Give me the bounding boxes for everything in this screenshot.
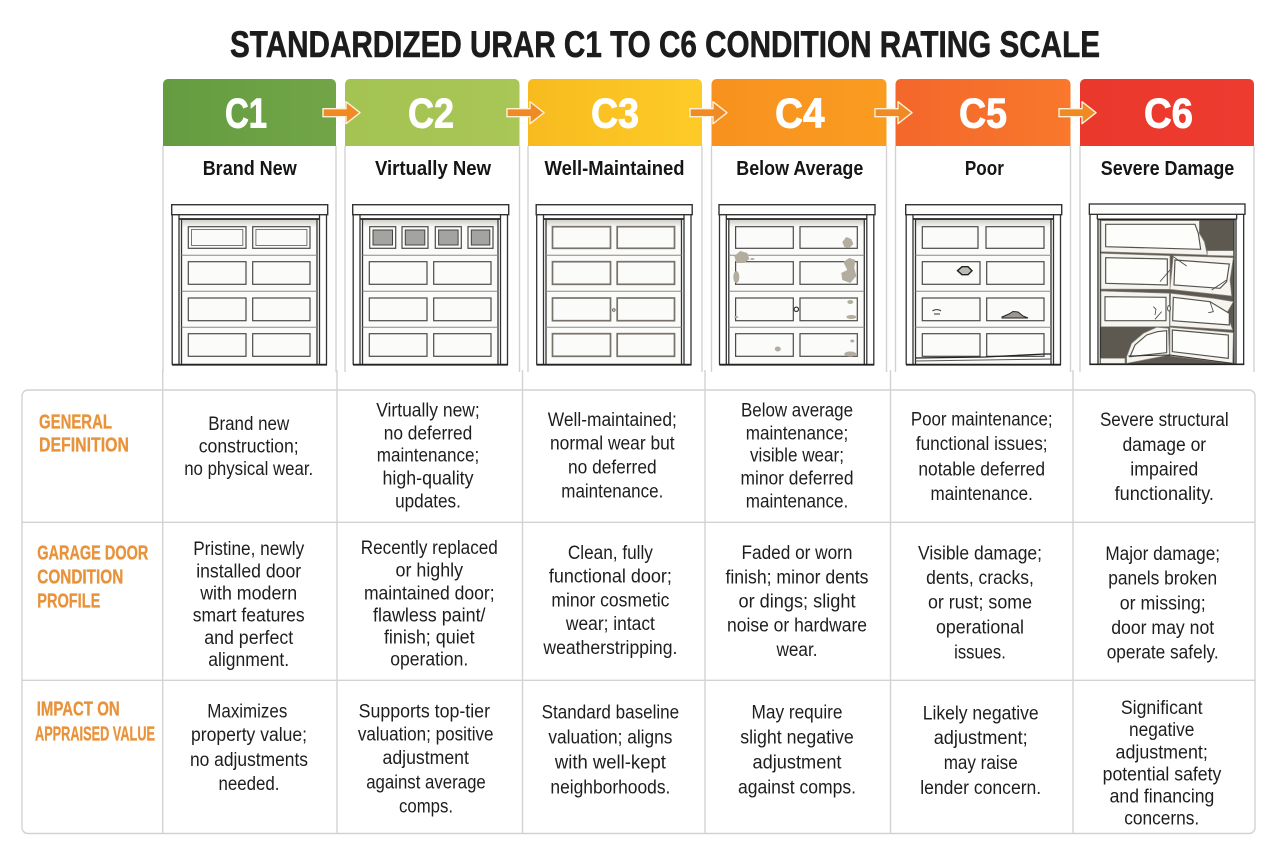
arrow: C2 to C3 xyxy=(507,102,544,124)
C6 value impact: concerns. xyxy=(1124,808,1199,829)
arrow: C3 to C4 xyxy=(690,102,727,124)
icon: C2 door with windows xyxy=(353,205,509,365)
C2 value impact: Supports top-tier xyxy=(359,701,491,722)
C6 value impact: Significant xyxy=(1121,698,1203,719)
C2 header xyxy=(345,79,520,146)
C1 value impact: Maximizes xyxy=(207,701,287,722)
icon: C3 maintained door xyxy=(536,205,692,365)
C4 value impact: May require xyxy=(752,702,842,723)
C4 header: C4 xyxy=(775,90,825,137)
row label: Garage Door Condition Profile: GARAGE DOOR xyxy=(37,542,149,564)
C4 general definition: Below average xyxy=(741,401,853,422)
C4 door profile xyxy=(726,543,868,661)
C4 value impact: against comps. xyxy=(738,777,856,798)
C6 value impact: and financing xyxy=(1110,787,1214,808)
C2 door profile: or highly xyxy=(396,561,464,582)
icon: C6 severely damaged door xyxy=(1089,204,1245,364)
C6 door profile: Major damage; xyxy=(1105,544,1220,565)
C1 door profile: and perfect xyxy=(204,628,294,649)
arrow: C4 to C5 xyxy=(875,102,912,124)
C2 general definition xyxy=(376,401,480,512)
C1 value impact xyxy=(190,701,308,795)
C2 door profile xyxy=(361,538,498,670)
C3 general definition: no deferred xyxy=(568,457,657,478)
C1 door profile xyxy=(193,539,305,671)
C1 general definition: construction; xyxy=(199,437,299,458)
C3 header: C3 xyxy=(591,90,639,137)
row label: General Definition xyxy=(39,411,129,457)
heading: Severe Damage: Severe Damage xyxy=(1101,157,1234,180)
C1 header: C1 xyxy=(225,90,267,137)
heading: Below Average: Below Average xyxy=(736,157,863,180)
C1 value impact: property value; xyxy=(191,725,307,746)
C1 header xyxy=(163,79,336,146)
C2 door profile: Recently replaced xyxy=(361,538,498,559)
icon: C1 new garage door xyxy=(172,205,328,365)
C6 header xyxy=(1080,79,1254,146)
C1 door profile: alignment. xyxy=(208,650,289,671)
C3 door profile: minor cosmetic xyxy=(551,591,669,612)
C5 door profile: operational xyxy=(936,617,1024,638)
C4 general definition: visible wear; xyxy=(750,446,844,467)
C2 general definition: no deferred xyxy=(384,423,472,444)
row label: Impact on Appraised Value xyxy=(35,699,155,746)
C1 door profile: installed door xyxy=(196,561,302,582)
C6 general definition xyxy=(1100,410,1229,505)
panel: condition table grid xyxy=(22,370,1255,834)
C1 value impact: needed. xyxy=(218,774,280,795)
C2 general definition: Virtually new; xyxy=(376,401,480,422)
C4 general definition: maintenance. xyxy=(746,491,848,512)
C4 door profile: wear. xyxy=(776,640,818,661)
heading: Well-Maintained: Well-Maintained xyxy=(544,157,684,180)
C3 value impact: neighborhoods. xyxy=(550,777,670,798)
C4 value impact: slight negative xyxy=(740,727,854,748)
row label: Impact on Appraised Value: APPRAISED VALUE xyxy=(35,724,155,746)
C2 general definition: updates. xyxy=(395,491,461,512)
C6 general definition: functionality. xyxy=(1115,484,1214,505)
column side rules xyxy=(163,146,1254,372)
C6 door profile: panels broken xyxy=(1108,569,1217,590)
C5 value impact: adjustment; xyxy=(934,728,1028,749)
C2 value impact: valuation; positive xyxy=(358,725,494,746)
C5 general definition: functional issues; xyxy=(916,434,1048,455)
C1 door profile: Pristine, newly xyxy=(193,539,305,560)
arrow: C1 to C2 xyxy=(323,102,360,124)
C3 door profile: wear; intact xyxy=(565,614,656,635)
C5 header xyxy=(896,79,1070,146)
row label: Garage Door Condition Profile: PROFILE xyxy=(37,590,100,612)
C2 value impact: comps. xyxy=(399,797,453,818)
C6 value impact xyxy=(1103,698,1222,829)
C5 header: C5 xyxy=(959,90,1007,137)
C6 value impact: potential safety xyxy=(1103,765,1222,786)
C5 general definition: notable deferred xyxy=(918,460,1045,481)
C3 value impact: Standard baseline xyxy=(542,702,679,723)
C3 general definition: Well-maintained; xyxy=(548,410,677,431)
heading: Virtually New: Virtually New xyxy=(375,157,491,180)
C5 door profile: or rust; some xyxy=(928,593,1032,614)
heading: Poor: Poor xyxy=(965,157,1004,180)
C6 door profile: or missing; xyxy=(1120,593,1206,614)
C3 door profile: functional door; xyxy=(549,566,672,587)
C3 value impact: valuation; aligns xyxy=(548,727,672,748)
C6 general definition: damage or xyxy=(1122,435,1207,456)
row label: General Definition: GENERAL xyxy=(39,411,112,433)
arrow: C5 to C6 xyxy=(1059,102,1096,124)
C4 header xyxy=(712,79,886,146)
C3 header xyxy=(528,79,702,146)
C5 general definition: maintenance. xyxy=(931,484,1033,505)
C4 door profile: or dings; slight xyxy=(738,591,856,612)
C2 value impact: adjustment xyxy=(382,748,470,769)
C1 door profile: smart features xyxy=(193,605,305,626)
C2 header: C2 xyxy=(408,90,454,137)
C4 door profile: finish; minor dents xyxy=(726,567,868,588)
C2 value impact xyxy=(358,701,494,818)
C6 general definition: impaired xyxy=(1130,460,1198,481)
C3 door profile: weatherstripping. xyxy=(542,638,677,659)
C5 value impact: may raise xyxy=(944,753,1018,774)
C5 door profile xyxy=(918,543,1042,663)
C4 value impact: adjustment xyxy=(752,752,842,773)
C2 value impact: against average xyxy=(366,772,486,793)
C3 door profile: Clean, fully xyxy=(568,543,653,564)
C1 value impact: no adjustments xyxy=(190,750,308,771)
C2 door profile: flawless paint/ xyxy=(373,606,486,627)
C6 value impact: negative xyxy=(1129,720,1194,741)
C6 general definition: Severe structural xyxy=(1100,410,1229,431)
C5 general definition xyxy=(911,410,1053,505)
C3 value impact xyxy=(542,702,679,798)
C1 general definition xyxy=(184,414,313,480)
C5 door profile: issues. xyxy=(954,642,1006,663)
C5 value impact xyxy=(920,703,1041,799)
icon: C4 door with peeling paint xyxy=(719,205,875,365)
C3 door profile xyxy=(542,543,677,659)
C5 door profile: dents, cracks, xyxy=(926,568,1034,589)
C5 general definition: Poor maintenance; xyxy=(911,410,1053,431)
C1 door profile: with modern xyxy=(199,583,297,604)
row label: General Definition: DEFINITION xyxy=(39,435,129,457)
C4 door profile: noise or hardware xyxy=(727,616,867,637)
C4 general definition xyxy=(740,401,854,512)
C3 general definition: maintenance. xyxy=(561,481,663,502)
row label: Garage Door Condition Profile xyxy=(37,542,149,612)
C1 general definition: Brand new xyxy=(208,414,289,435)
C4 general definition: minor deferred xyxy=(740,468,854,490)
C1 general definition: no physical wear. xyxy=(184,459,313,480)
C6 door profile xyxy=(1105,544,1220,663)
row label: Garage Door Condition Profile: CONDITION xyxy=(37,566,123,588)
C6 door profile: door may not xyxy=(1111,618,1215,639)
C3 value impact: with well-kept xyxy=(554,752,667,773)
C6 value impact: adjustment; xyxy=(1116,742,1208,763)
C4 value impact xyxy=(738,702,856,798)
row label: Impact on Appraised Value: IMPACT ON xyxy=(37,699,120,721)
C6 header: C6 xyxy=(1144,90,1193,137)
icon: C5 door with dents xyxy=(906,205,1062,365)
C4 general definition: maintenance; xyxy=(746,423,848,444)
C3 general definition: normal wear but xyxy=(550,433,675,454)
C2 general definition: high-quality xyxy=(382,468,474,490)
C4 door profile: Faded or worn xyxy=(742,543,852,564)
C5 door profile: Visible damage; xyxy=(918,543,1042,564)
C2 door profile: maintained door; xyxy=(364,583,495,604)
C2 door profile: finish; quiet xyxy=(384,627,475,648)
C2 general definition: maintenance; xyxy=(377,446,479,467)
C5 value impact: lender concern. xyxy=(920,778,1041,799)
heading: Brand New: Brand New xyxy=(203,157,297,180)
C5 value impact: Likely negative xyxy=(923,703,1039,724)
C6 door profile: operate safely. xyxy=(1107,642,1219,663)
C2 door profile: operation. xyxy=(390,649,468,670)
C3 general definition xyxy=(548,410,677,502)
